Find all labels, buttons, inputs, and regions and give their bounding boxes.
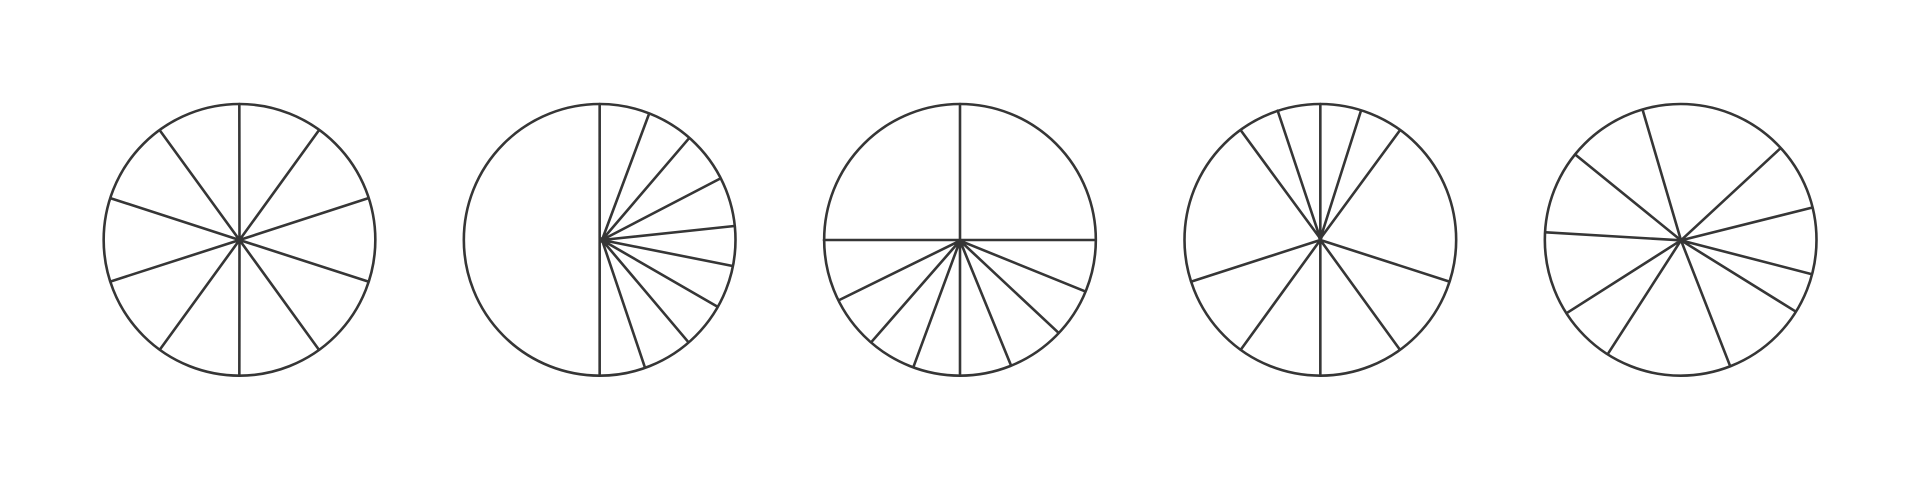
circle 5: irregular segments	[1545, 104, 1816, 376]
circle 2: half plus eight small segments	[464, 104, 735, 376]
circle 3: two quarters plus six small segments	[824, 104, 1096, 376]
circle 1: ten equal segments	[104, 104, 375, 376]
circle 4: mixed segments with narrow top slices	[1184, 104, 1456, 376]
